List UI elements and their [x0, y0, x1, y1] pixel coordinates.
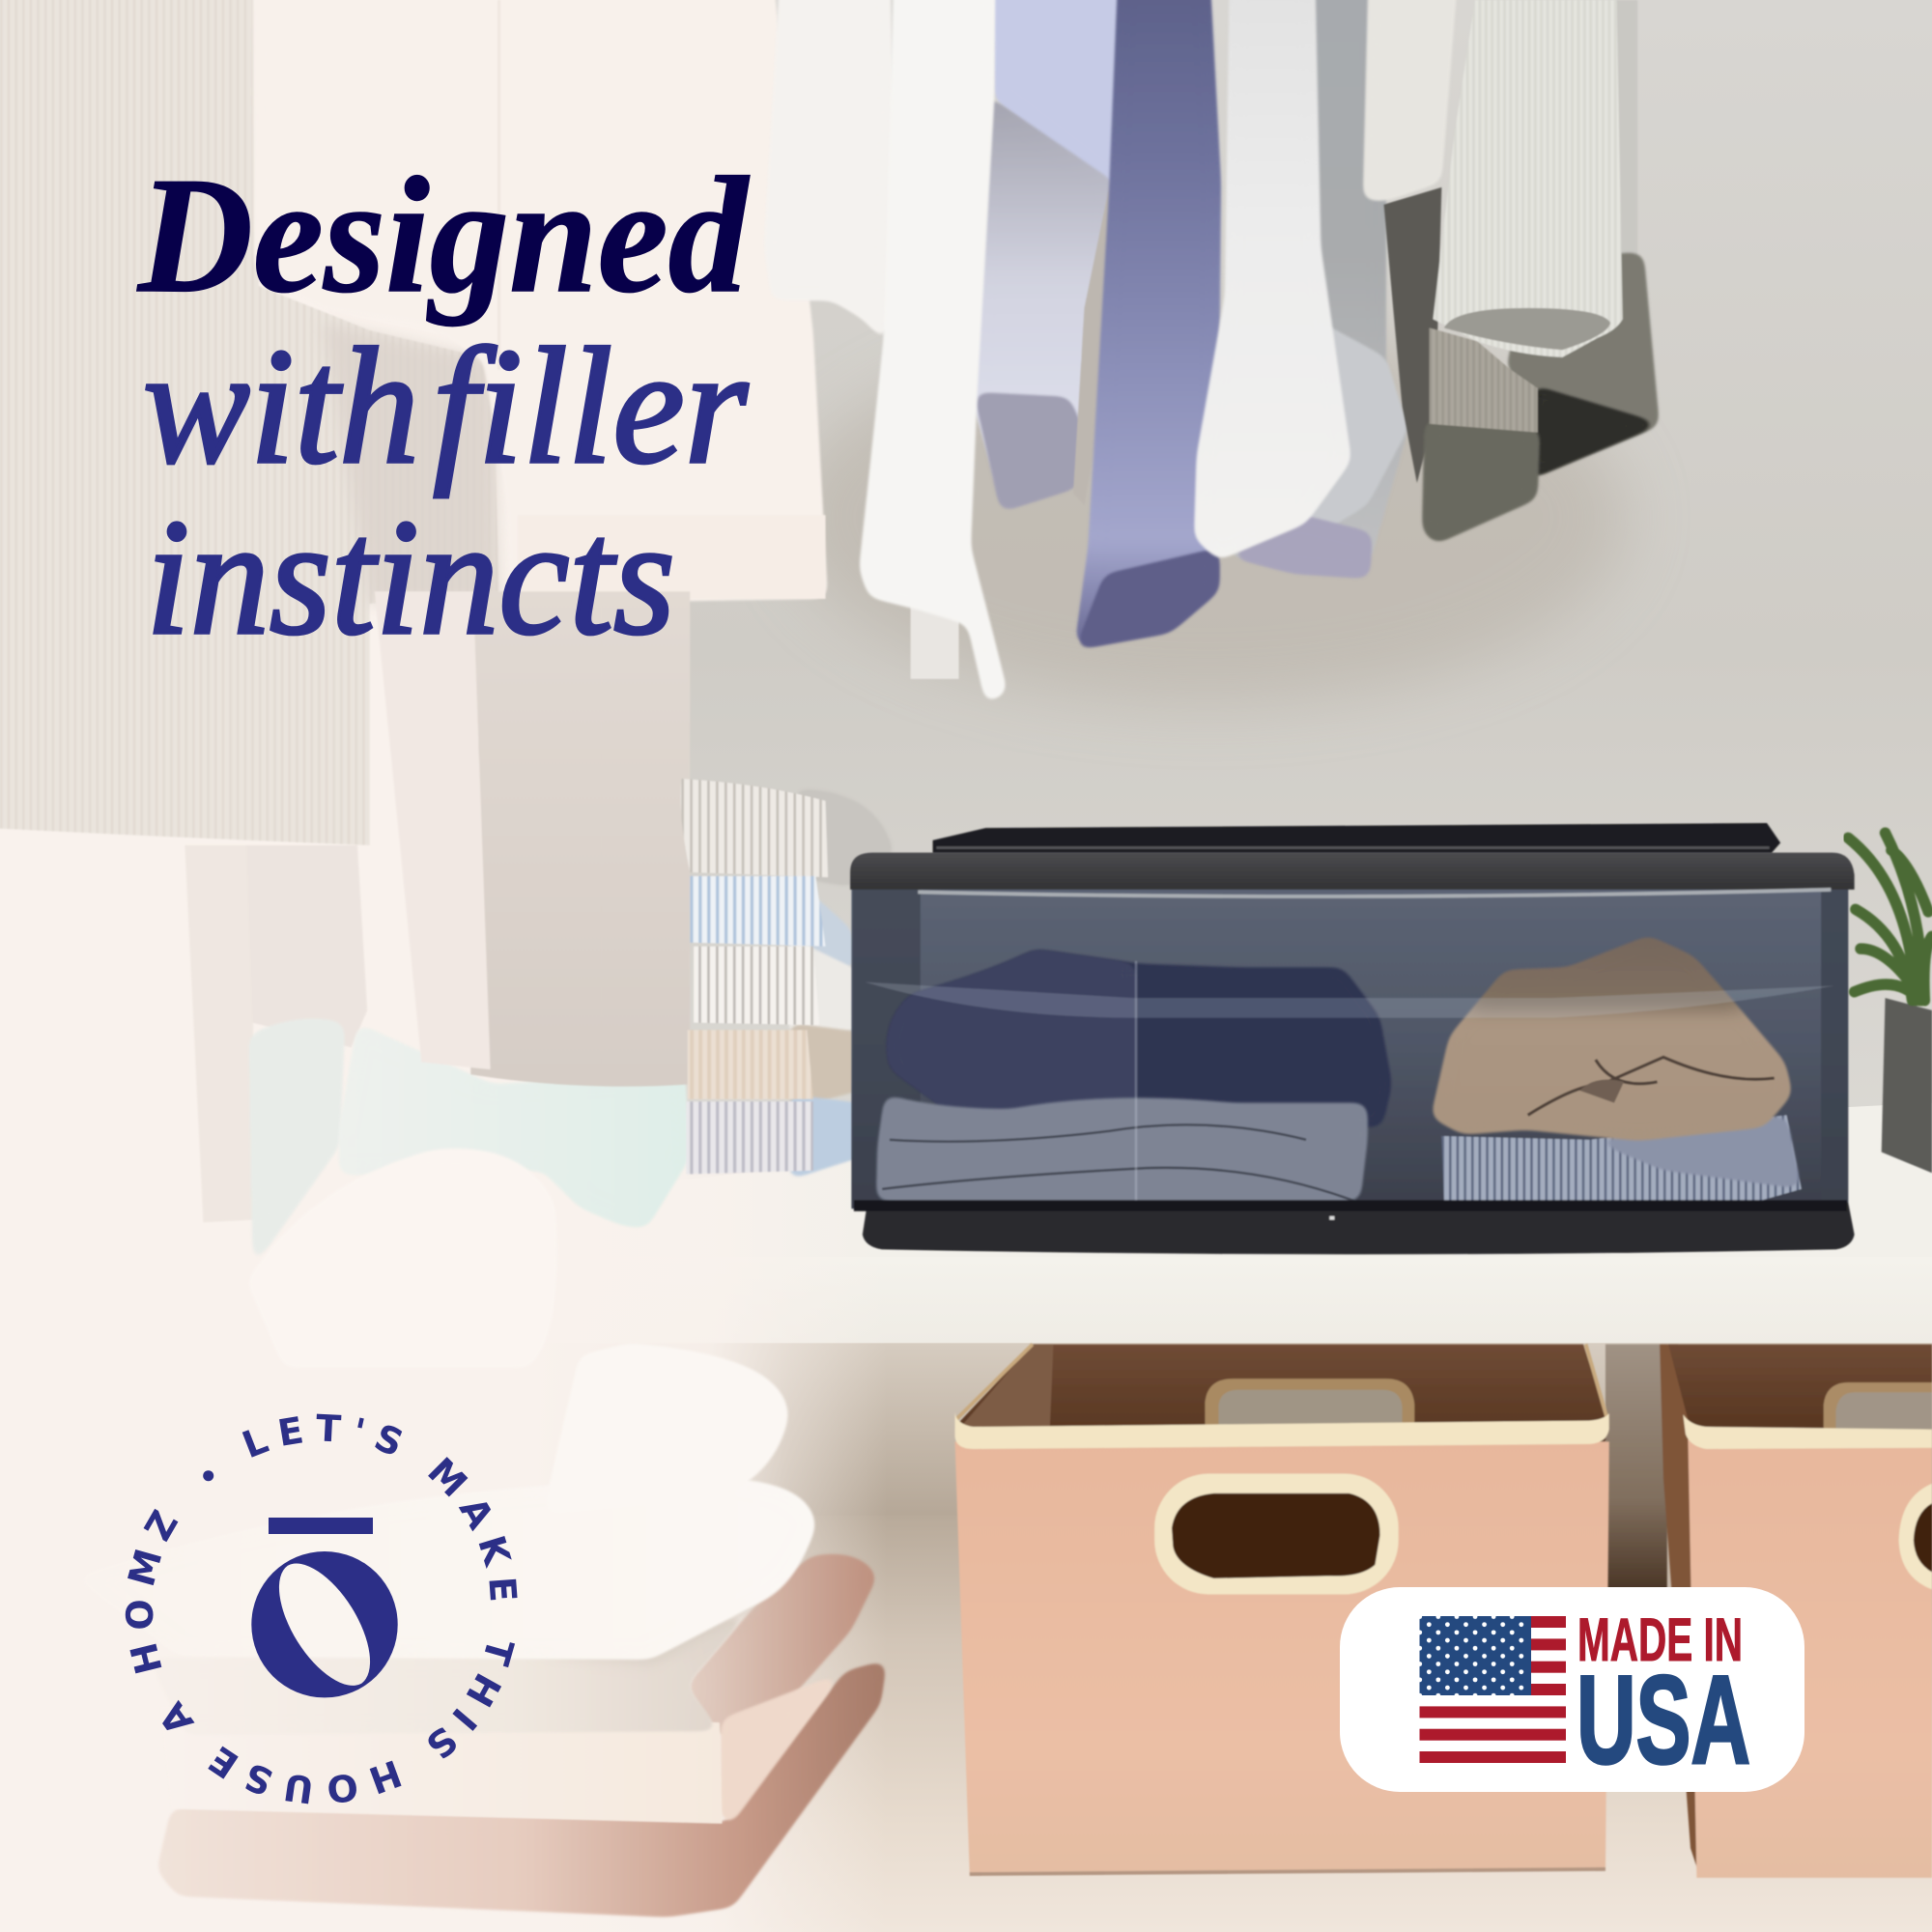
- large white towel: [74, 1479, 815, 1660]
- lower left wash: [0, 1158, 887, 1932]
- beige back panel: [1073, 187, 1109, 505]
- shirt 1 end: [795, 788, 895, 887]
- navy left lighter: [887, 949, 1136, 1127]
- top white towel: [542, 1343, 788, 1516]
- striped folded shirt: [1441, 1115, 1802, 1204]
- heading line 1: Designed: [136, 144, 751, 327]
- back handle opening: [1218, 1390, 1403, 1431]
- stacked shirt 4: [688, 1030, 813, 1099]
- drawer top band: [850, 853, 1855, 890]
- drawer base lip: [854, 1200, 1847, 1211]
- hanging clothes right: [764, 0, 1663, 705]
- lower cabinet floor: [0, 1516, 1932, 1932]
- pale sleeve tube: [911, 579, 958, 679]
- cream layer right: [721, 1671, 845, 1824]
- left bin inner side: [958, 1345, 1054, 1430]
- lavender blouse top: [993, 0, 1123, 189]
- shirt 4 end: [788, 1023, 867, 1109]
- US flag: [1420, 1616, 1566, 1763]
- lower pink blanket: [156, 1660, 887, 1918]
- right bin side: [1660, 1345, 1700, 1878]
- back handle rim: [1205, 1378, 1414, 1431]
- logo letter o: [251, 1551, 398, 1697]
- wall shadow under clothes: [788, 332, 1627, 702]
- drawer bottom band: [863, 1203, 1855, 1254]
- white fleece shirt: [1194, 0, 1351, 560]
- right bin back handle opening: [1836, 1392, 1932, 1430]
- knit layer: [148, 1605, 756, 1735]
- shirt 2 end: [788, 872, 855, 971]
- plant leaves: [1848, 833, 1932, 1001]
- pale ribbed column: [375, 591, 491, 1069]
- upper left wash: [0, 0, 690, 1182]
- stacked shirt 5: [686, 1101, 813, 1175]
- made in USA badge: [1340, 1587, 1804, 1792]
- side strip: [1616, 0, 1637, 261]
- navy clothes: [887, 949, 1392, 1127]
- faded garments left: [0, 0, 895, 1368]
- drawer window: [851, 886, 1848, 1208]
- left bin rim: [955, 1412, 1609, 1449]
- bottom grey layer: [1422, 419, 1540, 545]
- blanket hollow: [1579, 1079, 1624, 1103]
- tray lip: [936, 847, 1770, 849]
- grey folded stack: [876, 1094, 1368, 1202]
- window side left: [853, 890, 921, 1204]
- blouse hem: [974, 392, 1087, 513]
- left bin interior: [955, 1345, 1608, 1441]
- lower cabinet back: [0, 1343, 1932, 1518]
- grey blue blouse: [971, 94, 1115, 513]
- under-panel side: [185, 845, 254, 1222]
- upper pink knit: [686, 1553, 877, 1737]
- purple fold: [1074, 547, 1220, 650]
- potted plant: [1848, 833, 1932, 1173]
- right bin interior: [1668, 1345, 1932, 1432]
- blouse cuff: [518, 515, 826, 599]
- under-panel sleeve: [246, 845, 367, 1047]
- heading line 2: with: [143, 315, 419, 498]
- shelf top: [554, 1103, 1932, 1260]
- flag stripes: [1420, 1616, 1566, 1763]
- window shelf reflection: [865, 982, 1834, 1018]
- towel shadow: [529, 1589, 764, 1663]
- stacked shirt 1: [680, 779, 828, 877]
- USA label: USA: [1577, 1649, 1750, 1790]
- left bin front: [955, 1441, 1609, 1875]
- fold lines: [882, 1124, 1355, 1202]
- grey texture: [1306, 321, 1408, 542]
- window side right: [1821, 890, 1848, 1204]
- shelf front edge: [0, 1257, 1932, 1343]
- dark under panel: [1383, 187, 1441, 483]
- cream garment: [1363, 0, 1460, 201]
- sleeve opening: [1444, 308, 1610, 350]
- ribbed taupe: [1430, 327, 1538, 433]
- heading line 2: filler: [433, 315, 749, 498]
- blanket fold: [1528, 1057, 1775, 1115]
- flag canton: [1420, 1616, 1531, 1695]
- shirt 3 end: [788, 936, 860, 1037]
- storage drawer: [850, 823, 1855, 1254]
- right bin front: [1688, 1439, 1932, 1878]
- back wall: [0, 0, 1932, 1182]
- purple fabric: [1074, 0, 1221, 645]
- blouse fold: [497, 0, 500, 370]
- right bin handle rim: [1899, 1484, 1932, 1589]
- drawer latch: [1329, 1216, 1334, 1220]
- tan folded blanket: [1431, 935, 1793, 1141]
- handle hole: [1172, 1493, 1380, 1578]
- glass seam: [1135, 961, 1137, 1202]
- white shirt far left: [764, 0, 894, 345]
- circular slogan: LET'S MAKE THIS HOUSE A HOMZ: [126, 1414, 518, 1804]
- storage bin left: [955, 1345, 1609, 1875]
- silver handle strip: [918, 890, 1831, 896]
- black lining: [1528, 384, 1663, 480]
- grey garment: [1230, 0, 1408, 565]
- badge background: [1340, 1587, 1804, 1792]
- stacked shirt 3: [694, 947, 819, 1025]
- shirt 5 end: [788, 1094, 872, 1180]
- right bin rim: [1683, 1414, 1932, 1449]
- cream layer: [160, 1707, 722, 1824]
- heading line 2: [143, 315, 749, 498]
- mint sleeve: [249, 1018, 345, 1269]
- drawer top tray: [933, 823, 1780, 853]
- lavender hem: [1227, 513, 1373, 579]
- white fabric pile: [246, 1149, 557, 1368]
- right bin back handle: [1824, 1382, 1932, 1430]
- white main shirt: [859, 0, 1008, 705]
- plant pot: [1882, 998, 1932, 1173]
- ribbed white sleeve: [1433, 0, 1623, 357]
- slogan dot: [203, 1470, 213, 1481]
- sweater shade: [323, 323, 499, 604]
- heading line 3: instincts: [146, 486, 675, 669]
- gap between bins: [1605, 1345, 1667, 1790]
- mint folded cloth: [339, 1023, 690, 1229]
- storage bin right: [1605, 1345, 1932, 1878]
- ribbed sweater: [0, 0, 499, 845]
- dark grey right drape: [1506, 252, 1660, 480]
- bin bottom shadow: [970, 1869, 1605, 1874]
- heading: [136, 144, 751, 669]
- towel and blanket stack: [74, 1343, 887, 1918]
- left bin side lip: [956, 1345, 1606, 1419]
- stacked shirt 2: [690, 876, 826, 947]
- cream blouse: [252, 0, 828, 604]
- flag stars: [1420, 1616, 1528, 1695]
- mid dress column: [370, 591, 690, 1087]
- made in label: MADE IN: [1577, 1606, 1743, 1674]
- right bin handle hole: [1914, 1503, 1932, 1573]
- handle rim: [1154, 1474, 1399, 1595]
- logo macron bar: [269, 1518, 373, 1534]
- brand seal: [126, 1414, 518, 1804]
- blue grey sleeve: [1589, 1115, 1802, 1189]
